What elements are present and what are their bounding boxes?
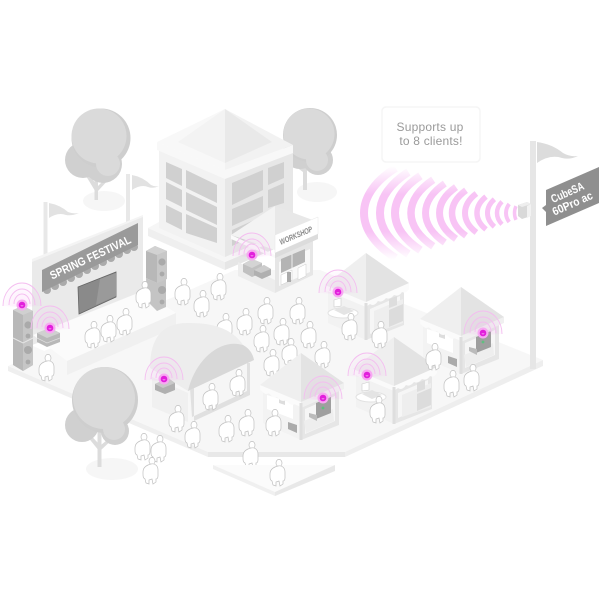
banner (42, 223, 138, 294)
workshop booth (231, 206, 318, 293)
speakers: stage left (13, 306, 33, 371)
flags: stage left (44, 174, 159, 258)
access point device on pole (518, 202, 531, 219)
arched tent (150, 323, 254, 422)
building (148, 109, 296, 270)
stage platform (33, 291, 176, 375)
tree: back left (65, 108, 130, 211)
callout (382, 107, 480, 162)
workshop equipment (281, 249, 306, 285)
floor: main plaza platform (8, 270, 543, 457)
device label: CubeSA (549, 181, 586, 206)
tent: far right (420, 287, 504, 374)
callout: Supports up (397, 120, 464, 134)
tent: upper middle (325, 253, 409, 340)
right pole with flag (530, 141, 578, 369)
tree: back right (283, 108, 337, 202)
building windows (166, 162, 284, 246)
workshop boxes (243, 259, 271, 279)
device label (542, 167, 599, 226)
callout: to 8 clients! (399, 134, 463, 148)
wireless beam (364, 168, 516, 258)
icon: wifi signals (3, 233, 502, 404)
people: around front tree (135, 433, 285, 486)
floor: lower platform (213, 465, 335, 496)
speakers: stage right (146, 246, 167, 311)
access point box on stage (37, 328, 60, 347)
stage people (39, 281, 151, 381)
stage (32, 215, 176, 375)
device label: 60Pro ac (551, 190, 595, 218)
stage back wall (32, 216, 143, 345)
tent: lower middle (353, 337, 437, 424)
people: foreground (169, 313, 479, 468)
tree: front (65, 367, 138, 480)
workshop sign: WORKSHOP (278, 225, 314, 247)
people: crowd behind tents (175, 273, 330, 376)
stage screen (78, 272, 116, 314)
banner: SPRING FESTIVAL (48, 234, 133, 282)
tent: lower left (260, 353, 344, 440)
